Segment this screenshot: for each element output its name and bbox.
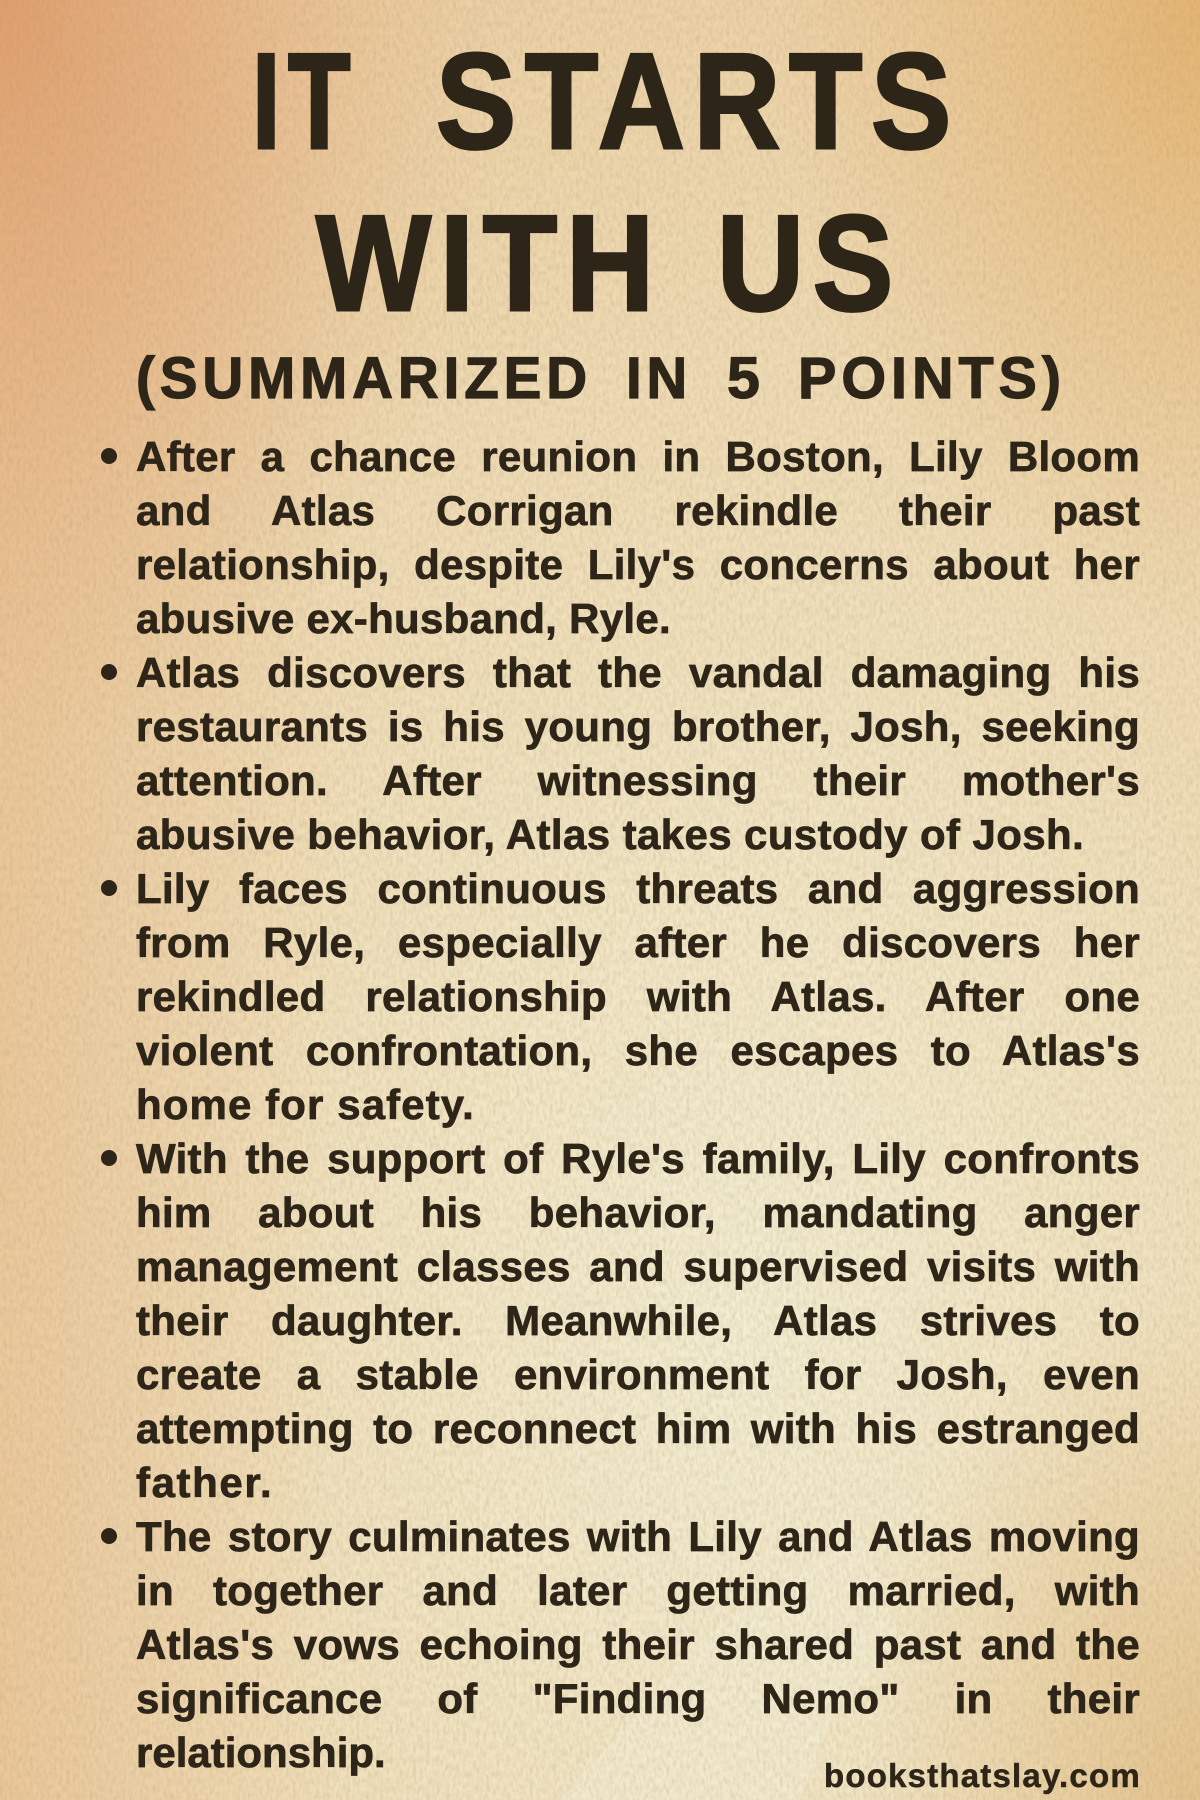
title line 1: STARTS bbox=[436, 25, 960, 177]
title line 1: IT bbox=[252, 25, 358, 177]
point 1: reunion in Boston: and Atlas Corrigan rekindle their past bbox=[136, 487, 1140, 534]
point 2: Atlas and Josh bbox=[101, 649, 1140, 858]
title line 1 bbox=[252, 25, 960, 177]
title line 2: US bbox=[717, 187, 902, 339]
title line 2: WITH bbox=[316, 187, 663, 339]
point 4: confronting Ryle: their daughter. Meanwhile, Atlas strives to bbox=[136, 1297, 1140, 1344]
point 5: moving in and marriage: significance of "Finding Nemo" in their bbox=[136, 1675, 1140, 1722]
website credit: booksthatslay.com bbox=[824, 1757, 1141, 1794]
subtitle: POINTS) bbox=[798, 346, 1066, 411]
point 4: confronting Ryle bbox=[101, 1135, 1140, 1506]
point 4: confronting Ryle: attempting to reconnect him with his estranged bbox=[136, 1405, 1140, 1452]
subtitle: 5 bbox=[727, 346, 765, 411]
point 1: reunion in Boston: After a chance reunion in Boston, Lily Bloom bbox=[136, 433, 1140, 480]
subtitle bbox=[136, 346, 1066, 411]
point 5: moving in and marriage bbox=[101, 1513, 1140, 1776]
point 3: threats from Ryle: violent confrontation, she escapes to Atlas's bbox=[136, 1027, 1140, 1074]
subtitle: IN bbox=[626, 346, 692, 411]
point 5: moving in and marriage: relationship. bbox=[136, 1729, 386, 1776]
point 4: confronting Ryle: With the support of Ryle's family, Lily confronts bbox=[136, 1135, 1140, 1182]
point 4: confronting Ryle: father. bbox=[136, 1459, 273, 1506]
point 5: moving in and marriage: The story culminates with Lily and Atlas moving bbox=[136, 1513, 1140, 1560]
point 3: threats from Ryle: rekindled relationship with Atlas. After one bbox=[136, 973, 1140, 1020]
point 4: confronting Ryle: him about his behavior, mandating anger bbox=[136, 1189, 1140, 1236]
point 3: threats from Ryle: home for safety. bbox=[136, 1081, 475, 1128]
point 3: threats from Ryle bbox=[101, 865, 1140, 1128]
point 4: confronting Ryle: management classes and supervised visits with bbox=[136, 1243, 1140, 1290]
point 2: Atlas and Josh: Atlas discovers that the vandal damaging his bbox=[136, 649, 1140, 696]
point 2: Atlas and Josh: restaurants is his young brother, Josh, seeking bbox=[136, 703, 1140, 750]
point 1: reunion in Boston bbox=[101, 433, 1140, 642]
point 1: reunion in Boston: relationship, despite Lily's concerns about her bbox=[136, 541, 1140, 588]
point 3: threats from Ryle: from Ryle, especially after he discovers her bbox=[136, 919, 1140, 966]
point 1: reunion in Boston: abusive ex-husband, Ryle. bbox=[136, 595, 671, 642]
title line 2 bbox=[316, 187, 902, 339]
subtitle: (SUMMARIZED bbox=[136, 346, 592, 411]
point 5: moving in and marriage: Atlas's vows echoing their shared past and the bbox=[136, 1621, 1140, 1668]
point 5: moving in and marriage: in together and later getting married, with bbox=[136, 1567, 1140, 1614]
point 2: Atlas and Josh: attention. After witnessing their mother's bbox=[136, 757, 1140, 804]
point 4: confronting Ryle: create a stable environment for Josh, even bbox=[136, 1351, 1140, 1398]
point 2: Atlas and Josh: abusive behavior, Atlas takes custody of Josh. bbox=[136, 811, 1084, 858]
point 3: threats from Ryle: Lily faces continuous threats and aggression bbox=[136, 865, 1140, 912]
